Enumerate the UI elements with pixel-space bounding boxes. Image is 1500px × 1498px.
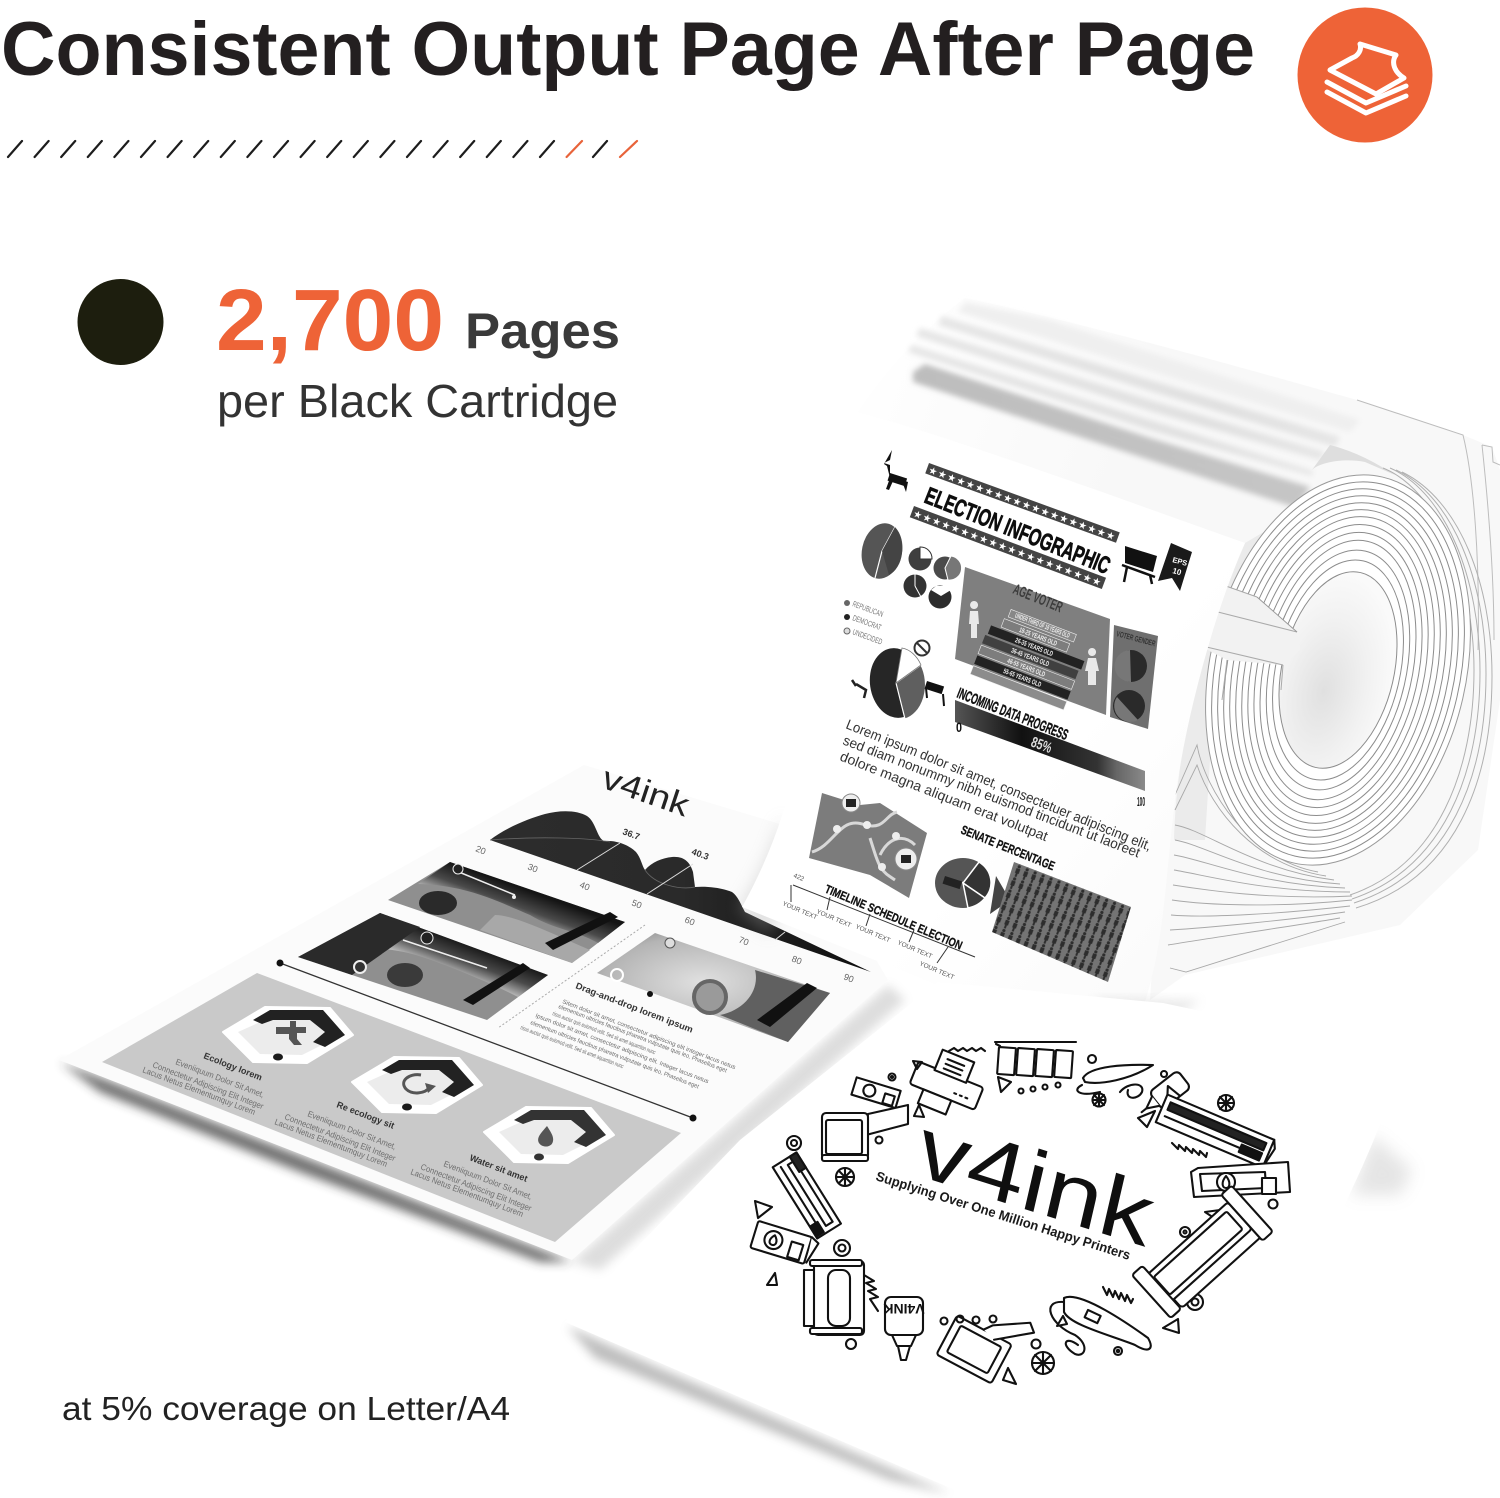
chart axis labels: 40	[578, 880, 591, 893]
age bars: 46-55 YEARS OLD	[1006, 658, 1046, 679]
progress bar	[955, 700, 1145, 809]
pie legend: UNDECIDED	[851, 627, 884, 647]
timeline: 422	[792, 872, 805, 883]
progress bar: 0	[956, 719, 962, 735]
photo panel 2	[298, 913, 548, 1020]
area chart	[474, 811, 871, 985]
icon: cartridge top right	[1077, 1065, 1153, 1098]
icon: podium and EPS tag: 10	[1171, 566, 1183, 577]
icon: mouse-shaped printer head bottom	[1050, 1297, 1151, 1355]
icon: long toner right	[1153, 1086, 1281, 1169]
icon: circles and target right	[1103, 1200, 1278, 1333]
icon: long toner left	[773, 1152, 841, 1239]
paper roll stack	[858, 298, 1500, 1000]
icon: ink bottle top right	[1135, 1070, 1191, 1121]
feature captions: Connectetur Adipiscing Elit Integer	[419, 1162, 533, 1213]
senate heading: SENATE PERCENTAGE	[959, 823, 1057, 873]
article text: Sitem dolor sit amet, consectetur adipiscing elit integer lacus netus	[561, 999, 736, 1071]
article text: risus auctor quis euismod velit. Sed sit amet aquamlan nunc	[519, 1025, 624, 1070]
article text: elementum ultricies faucibus pharetra vulputate quis leo, Phasellus eget	[557, 1004, 728, 1074]
photo panel 3	[597, 933, 830, 1042]
feature captions: Lacus Netus Elementumquy Lorem	[141, 1065, 257, 1117]
icon: drum left bottom	[804, 1260, 864, 1335]
icon: zigzags, triangles and dots top	[888, 1048, 1167, 1094]
large pie chart	[852, 640, 944, 721]
icon: triangle and zigzag right	[1138, 1111, 1207, 1157]
hexagon icon: ink drop	[484, 1107, 614, 1163]
roll slit	[1198, 585, 1300, 700]
voter gender panel: VOTER GENDER	[1115, 629, 1157, 648]
feature captions: Lacus Netus Elementumquy Lorem	[273, 1117, 389, 1169]
pie legend	[844, 599, 885, 647]
icon: left marks	[755, 1105, 924, 1256]
senate pie chart	[935, 858, 991, 908]
article text: elementum ultricies faucibus pharetra vulputate quis leo, Phasellus eget	[529, 1020, 700, 1090]
senate people panel	[992, 862, 1131, 982]
chart axis labels: 30	[526, 862, 539, 875]
timeline: TIMELINE SCHEDULE ELECTION	[823, 882, 965, 953]
feature captions: Connectetur Adipiscing Elit Integer	[283, 1112, 397, 1163]
age voter panel	[955, 567, 1110, 715]
article text: Drag-and-drop lorem ipsum	[574, 981, 695, 1035]
feature captions: Lacus Netus Elementumquy Lorem	[409, 1167, 525, 1219]
chart axis labels: 50	[630, 898, 643, 911]
star band top: ★★★★★★★★★★★★★★★★★★★★	[927, 465, 1116, 543]
feature captions	[141, 1051, 534, 1219]
chart axis labels: 20	[474, 844, 487, 857]
icon: ink bottle bottom: V4INK	[883, 1301, 925, 1317]
feature captions: Eveniiquum Dolor Sit Amet,	[442, 1159, 534, 1202]
timeline: YOUR TEXT	[815, 908, 852, 929]
chart axis labels: 80	[790, 954, 803, 967]
sheet body	[742, 412, 1245, 1005]
yield unit: Pages	[465, 303, 620, 359]
outer sheet edges	[1357, 400, 1500, 650]
figures	[969, 601, 979, 638]
article text: risus auctor quis euismod velit. Sed sit amet aquamlan nunc	[551, 1011, 656, 1056]
pie legend: REPUBLICAN	[851, 599, 885, 619]
hexagon icon: tap	[223, 1007, 353, 1063]
timeline: YOUR TEXT	[918, 960, 955, 981]
pie charts cluster	[857, 519, 962, 608]
icon: small camera cartridge top left	[851, 1077, 901, 1108]
tagline: Supplying Over One Million Happy Printers	[874, 1169, 1132, 1263]
pie legend: DEMOCRAT	[851, 613, 883, 632]
infographic heading: ELECTION INFOGRAPHIC	[921, 482, 1114, 580]
timeline: YOUR TEXT	[896, 939, 933, 960]
sheet	[565, 982, 1399, 1490]
icon: cartridge left	[750, 1221, 820, 1266]
sheet	[59, 765, 888, 1260]
title: Consistent Output Page After Page	[1, 7, 1255, 92]
age bars: 18-25 YEARS OLD	[1018, 627, 1058, 648]
age voter panel: AGE VOTER	[1011, 581, 1065, 616]
body lorem text: Lorem ipsum dolor sit amet, consectetuer adipiscing elit,	[844, 716, 1154, 854]
icon: donkey mascot	[884, 450, 908, 492]
timeline: YOUR TEXT	[854, 923, 891, 944]
icon: orange circle with paper stack	[1298, 8, 1432, 142]
coverage footnote: at 5% coverage on Letter/A4	[62, 1391, 510, 1428]
stacked sheet shadow bands	[908, 302, 1395, 508]
article text	[519, 981, 736, 1090]
gray gap behind sheet	[1174, 505, 1310, 840]
icon: flowers	[836, 1094, 1234, 1374]
middle printed sheet	[59, 760, 888, 1260]
chart value labels: 36.7	[621, 826, 641, 842]
chart axis labels	[474, 844, 855, 985]
icon: ink tanks	[995, 1042, 1076, 1078]
icon: podium and EPS tag: EPS	[1171, 555, 1188, 568]
chart axis labels: 60	[683, 915, 696, 928]
body lorem text: dolore magna aliquam erat volutpat	[838, 748, 1050, 844]
front curled sheet	[742, 412, 1245, 1005]
feature captions: Eveniiquum Dolor Sit Amet,	[306, 1109, 398, 1152]
chart axis labels: 70	[737, 935, 750, 948]
age bars: 36-45 YEARS OLD	[1010, 648, 1050, 668]
front curled sheet: 100	[1137, 794, 1145, 809]
icon ring	[750, 1042, 1290, 1390]
bottom logo sheet	[565, 982, 1399, 1490]
v4ink logo: v4ink	[909, 1099, 1163, 1265]
divider line with end dots	[276, 960, 696, 1122]
icon: rectangular cartridge with handle top left	[822, 1105, 908, 1161]
shadow of front sheet on middle sheet	[738, 815, 790, 935]
stack body	[858, 298, 1500, 1000]
feature captions: Ecology lorem	[202, 1051, 264, 1083]
star band bottom: ★★★★★★★★★★★★★★★★★★★★	[911, 509, 1103, 589]
dashed divider	[498, 925, 645, 1028]
icon: printer	[904, 1043, 991, 1124]
article text: Ipsum dolor sit amet, consectetur adipiscing elit. Integer lacus netus	[534, 1013, 709, 1085]
icon: misc bottom marks	[767, 1273, 1040, 1384]
brand logo small: v4ink	[598, 760, 694, 824]
slash divider row	[8, 141, 637, 157]
icon: cartridge with drop right	[1191, 1162, 1290, 1197]
hexagon icon: recycle arrow	[352, 1057, 482, 1113]
feature captions: Water sit amet	[468, 1153, 529, 1184]
progress bar: 85%	[1029, 734, 1054, 757]
roll end spiral rings	[1169, 448, 1500, 892]
bottom sheet shadows	[567, 998, 1412, 1494]
icon: rectangular cartridge with handle bottom	[936, 1291, 1037, 1390]
age bars	[970, 604, 1092, 711]
body lorem text: sed diam nonummy nibh euismod tincidunt ut laoreet	[841, 732, 1143, 860]
timeline	[781, 872, 975, 981]
yield caption: per Black Cartridge	[217, 375, 618, 427]
chart axis labels: 90	[842, 972, 855, 985]
age bars: 26-35 YEARS OLD	[1014, 637, 1054, 658]
age bars: 55-65 YEARS OLD	[1002, 668, 1042, 689]
feature captions: Eveniiquum Dolor Sit Amet,	[174, 1057, 266, 1100]
progress heading: INCOMING DATA PROGRESS	[955, 685, 1071, 744]
timeline: YOUR TEXT	[781, 900, 818, 921]
chart value labels	[621, 826, 710, 862]
arrow	[990, 876, 1010, 914]
map	[809, 793, 927, 898]
icon: big drum right	[1132, 1185, 1273, 1321]
photo panel 1	[388, 862, 625, 963]
yield number: 2,700	[216, 272, 444, 369]
gray feature panel	[102, 973, 681, 1242]
feature captions: Connectetur Adipiscing Elit Integer	[151, 1060, 265, 1111]
chart value labels: 40.3	[690, 846, 710, 862]
middle sheet shadow	[60, 985, 905, 1270]
voter gender panel	[1110, 625, 1158, 729]
icon: podium and EPS tag	[1122, 543, 1192, 591]
page yield figure	[216, 272, 620, 427]
feature captions: Re ecology sit	[335, 1100, 396, 1131]
fanned lower sheet lines	[1168, 745, 1352, 972]
age bars: UNDER THIRD OF 18 YEARS OLD	[1014, 613, 1070, 640]
icon: ink bottle bottom	[883, 1297, 925, 1360]
black ink dot	[78, 279, 164, 365]
